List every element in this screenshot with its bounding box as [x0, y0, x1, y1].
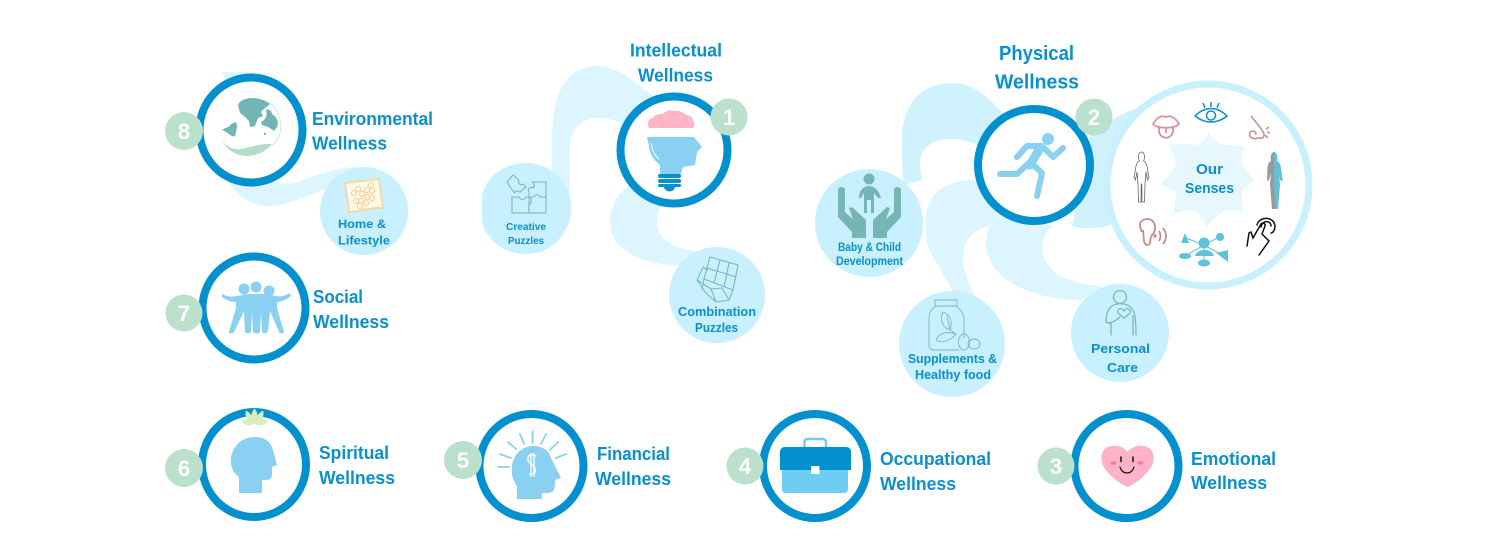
icon: tongue [1153, 116, 1179, 138]
panel: physical wellness [978, 42, 1112, 221]
icon: runner [1000, 133, 1063, 196]
icon: smiling heart [1101, 446, 1154, 487]
label: Wellness [995, 70, 1079, 94]
badge 4: 4 [739, 454, 752, 479]
label [880, 448, 991, 494]
bubble: supplements and healthy food [899, 291, 1005, 397]
icon: twisted cube [697, 257, 738, 302]
icon: nose [1250, 116, 1270, 139]
badge 3: 3 [1050, 454, 1062, 479]
label: Social [313, 286, 363, 307]
icon: body outline [1134, 152, 1149, 202]
badge 2 [1076, 98, 1112, 136]
bubble label [1091, 341, 1150, 375]
ring [763, 414, 867, 518]
ribbon: physical to personal care [986, 212, 1102, 301]
ring [620, 96, 728, 204]
badge 7: 7 [178, 301, 190, 326]
bubble label: Puzzles [508, 236, 544, 247]
bubble label: Puzzles [695, 320, 738, 335]
bubble: home and lifestyle [320, 167, 408, 255]
label: Physical [999, 42, 1074, 65]
badge 8: 8 [178, 119, 190, 144]
label [1191, 448, 1276, 493]
bubble label [506, 222, 546, 247]
panel: intellectual wellness [620, 40, 748, 204]
badge 5: 5 [457, 448, 469, 473]
bubble label: Personal [1091, 341, 1150, 356]
label: Wellness [313, 311, 389, 332]
label: Wellness [595, 468, 671, 489]
label: Environmental [312, 108, 433, 129]
label [595, 443, 671, 489]
badge 1 [710, 98, 748, 136]
bubble: combination puzzles [669, 247, 765, 343]
bubble: personal care [1071, 284, 1169, 382]
bubble label: Combination [678, 304, 756, 319]
icon: three friends [222, 282, 291, 334]
panel: occupational wellness [726, 414, 991, 518]
bubble label [908, 352, 997, 382]
panel: environmental wellness [165, 78, 433, 182]
bubble disc [669, 247, 765, 343]
badge 5 [444, 441, 482, 479]
label [313, 286, 389, 332]
ring [202, 256, 306, 360]
badge 4 [726, 448, 764, 484]
bubble label [338, 217, 390, 248]
bubble disc [899, 291, 1005, 397]
label [319, 442, 395, 488]
bubble label: Supplements & [908, 352, 997, 366]
badge 2: 2 [1088, 105, 1100, 130]
bubble disc [815, 169, 923, 277]
bubble label: Care [1107, 360, 1138, 375]
icon: lotus [242, 409, 267, 425]
icon: senses network [1179, 233, 1228, 266]
senses heading: Our [1196, 161, 1223, 178]
badge 6 [165, 449, 203, 487]
bubble disc [1071, 284, 1169, 382]
ring [202, 412, 306, 517]
icon: head with dollar and rays [498, 431, 566, 499]
badge 3 [1038, 448, 1074, 484]
senses heading [1185, 161, 1234, 197]
icon: briefcase [780, 439, 851, 493]
bubble label: Baby & Child [838, 242, 901, 254]
label: Wellness [638, 64, 713, 86]
senses heading: Senses [1185, 180, 1234, 197]
ribbon: physical to baby and child [902, 83, 1004, 185]
label: Wellness [319, 467, 395, 488]
bubble disc [320, 167, 408, 255]
icon: touch hand [1247, 218, 1275, 255]
label: Financial [597, 443, 670, 464]
ribbon: intellectual to creative puzzles [552, 66, 654, 195]
ribbon: physical to supplements [926, 180, 1002, 296]
icon: jigsaw puzzle [507, 175, 546, 213]
label: Emotional [1191, 448, 1276, 469]
panel: financial wellness [444, 414, 671, 518]
label [630, 40, 722, 86]
bubble: creative puzzles [482, 163, 571, 254]
panel: emotional wellness [1038, 414, 1276, 518]
ribbon: intellectual to combination puzzles [610, 185, 702, 266]
bubble label [836, 242, 903, 268]
panel: spiritual wellness [165, 409, 395, 517]
icon: body grey and blue [1267, 152, 1283, 209]
label: Wellness [880, 473, 956, 494]
bubble label: Lifestyle [338, 234, 390, 248]
badge 8 [165, 112, 203, 150]
ring [1074, 414, 1178, 518]
label [312, 108, 433, 154]
icon: globe and leaf [222, 98, 281, 156]
icon: brain and light bulb head [647, 110, 702, 192]
label: Wellness [312, 132, 387, 154]
label: Occupational [880, 448, 991, 469]
bubble label [678, 304, 756, 335]
icon: ear [1140, 219, 1166, 245]
panel: our senses [1107, 84, 1309, 286]
bubble label: Development [836, 256, 903, 268]
badge 7 [166, 294, 202, 332]
icon: hands holding child [838, 174, 901, 238]
badge 6: 6 [178, 456, 190, 481]
label: Spiritual [319, 442, 389, 463]
ribbon: physical to our senses [1072, 108, 1138, 228]
bubble label: Home & [338, 217, 386, 231]
ring [200, 78, 302, 182]
ring [978, 109, 1090, 221]
icon: person with heart [1106, 290, 1136, 335]
senses outer circle [1107, 84, 1309, 286]
bubble label: Healthy food [915, 368, 991, 382]
ribbon: environmental connector [222, 72, 356, 206]
ring [480, 414, 584, 518]
bubble: baby and child development [815, 169, 923, 277]
senses centre sun [1160, 132, 1255, 228]
icon: head silhouette [231, 437, 277, 493]
label: Wellness [1191, 472, 1267, 493]
badge 1: 1 [723, 105, 735, 130]
icon: honeycomb sheet [345, 179, 383, 212]
icon: eye [1195, 102, 1227, 122]
label: Intellectual [630, 40, 722, 60]
bubble label: Creative [506, 222, 546, 233]
icon: supplement jar [929, 300, 980, 350]
label [995, 42, 1079, 94]
panel: social wellness [166, 256, 389, 360]
bubble disc [482, 163, 571, 254]
